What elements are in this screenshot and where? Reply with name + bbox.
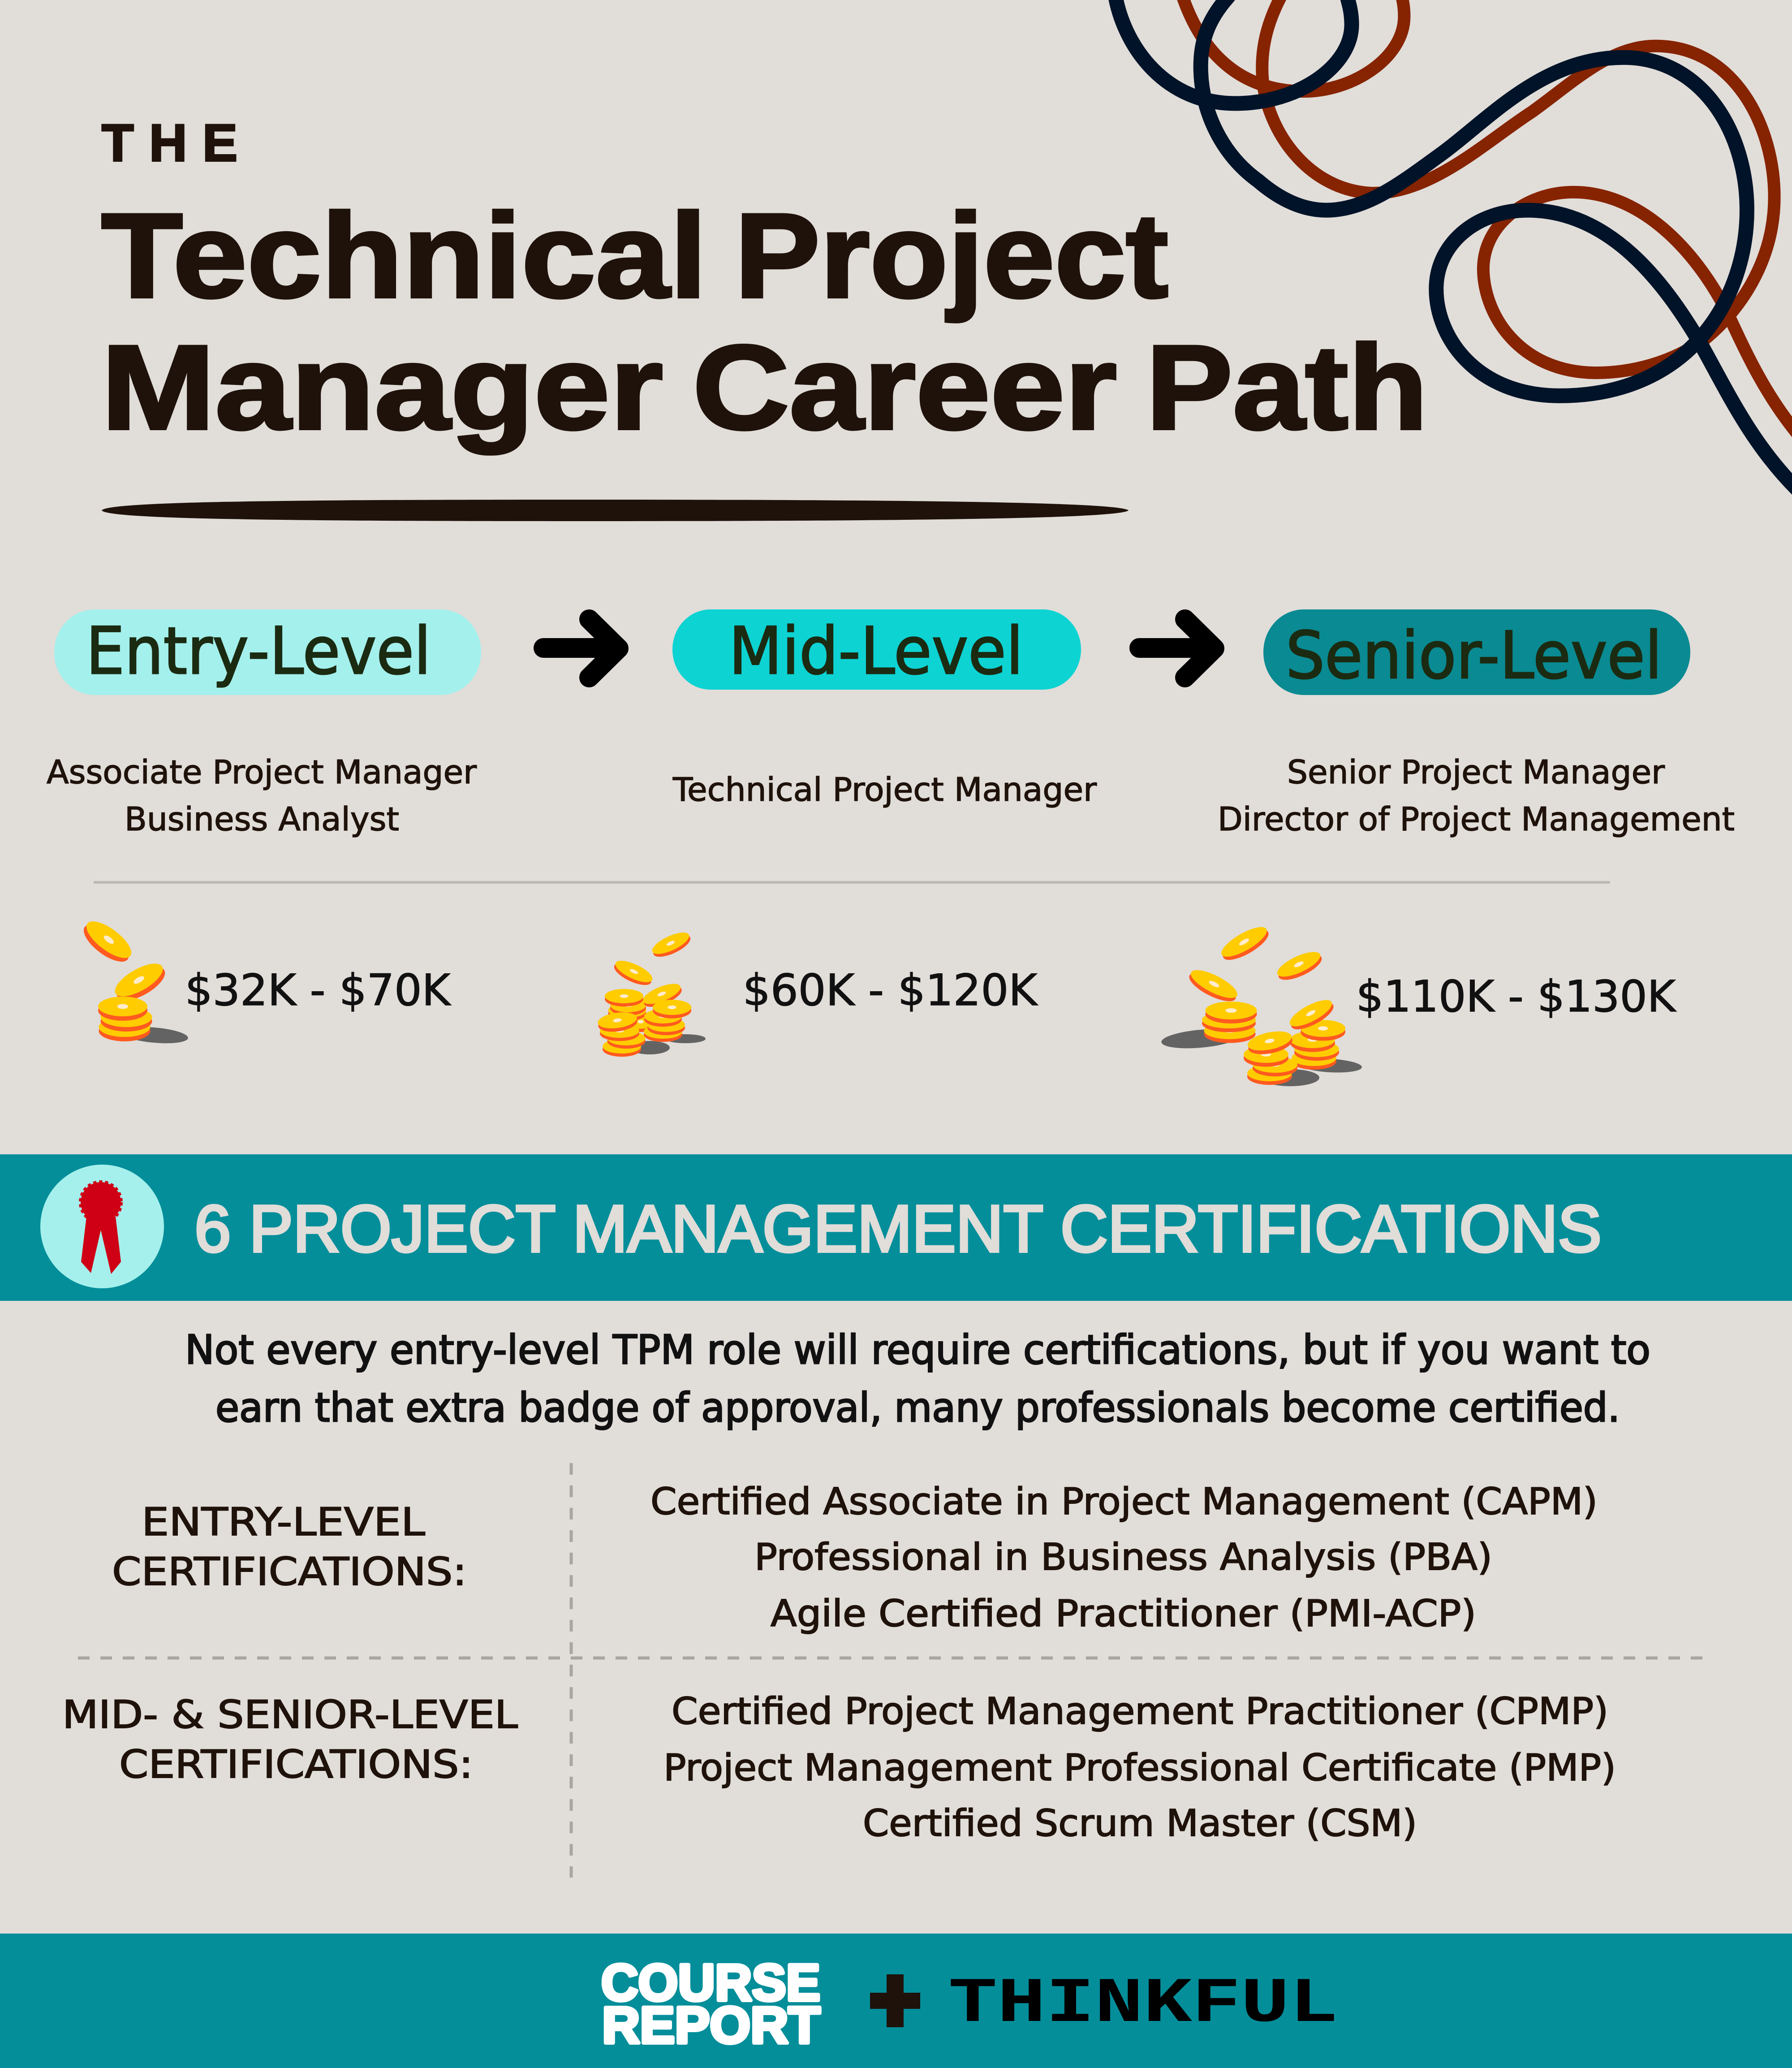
logo: Course Report: COURSE <box>601 1954 820 2012</box>
salaries <box>78 915 1676 1086</box>
icon: coins mid <box>597 928 706 1057</box>
salary entry: $32K - $70K <box>185 965 451 1015</box>
logo: Course Report: REPORT <box>602 1997 820 2054</box>
title line 2 <box>101 320 1428 455</box>
senior-level roles: Director of Project Management <box>1218 800 1735 838</box>
list: entry-level certifications <box>650 1481 1598 1635</box>
title line 2: Manager <box>101 320 663 455</box>
certification table <box>62 1481 1616 1845</box>
label: mid and senior certifications: MID- & SENIOR-LEVEL <box>62 1692 518 1737</box>
title line 1 <box>101 188 1168 324</box>
label: mid and senior certifications: CERTIFICATIONS: <box>119 1742 473 1787</box>
title line 1: Project <box>735 188 1168 324</box>
list: entry-level certifications: Agile Certified Practitioner (PMI-ACP) <box>771 1593 1476 1635</box>
intro paragraph: earn that extra badge of approval, many professionals become certified. <box>215 1384 1620 1431</box>
title line 2: Career <box>693 320 1117 454</box>
label: entry-level certifications: ENTRY-LEVEL <box>142 1500 425 1545</box>
list: entry-level certifications: Professional in Business Analysis (PBA) <box>754 1536 1492 1579</box>
pill: senior-level: Senior-Level <box>1286 618 1662 694</box>
logo: Course Report <box>601 1954 820 2054</box>
entry-level roles: Business Analyst <box>125 800 399 838</box>
arrow: mid to senior <box>1139 619 1215 678</box>
senior-level roles: Senior Project Manager <box>1287 753 1665 791</box>
label: mid and senior certifications <box>62 1692 518 1787</box>
arrow: entry to mid <box>543 619 619 678</box>
intro paragraph <box>185 1326 1650 1431</box>
list: mid and senior certifications: Certified Project Management Practitioner (CPMP) <box>672 1690 1608 1733</box>
salary senior: $110K - $130K <box>1356 971 1676 1022</box>
pill: mid-level: Mid-Level <box>729 613 1023 689</box>
senior-level roles <box>1218 753 1735 838</box>
eyebrow: THE: THE <box>102 113 237 172</box>
entry-level roles <box>47 753 477 838</box>
title line 1: Technical <box>101 188 707 323</box>
mid-level role: Technical Project Manager <box>672 771 1097 808</box>
certifications banner <box>0 1154 1792 1301</box>
list: entry-level certifications: Certified Associate in Project Management (CAPM) <box>650 1481 1598 1523</box>
title line 2: Path <box>1146 320 1428 454</box>
footer band <box>0 1934 1792 2068</box>
salary mid: $60K - $120K <box>743 965 1038 1015</box>
pill: entry-level: Entry-Level <box>86 613 431 689</box>
icon: coins senior <box>1161 922 1362 1086</box>
career levels <box>54 609 1690 695</box>
intro paragraph: Not every entry-level TPM role will require certifications, but if you want to <box>185 1326 1650 1373</box>
list: mid and senior certifications <box>663 1690 1616 1845</box>
icon: coins entry <box>78 915 189 1045</box>
banner heading: 6 PROJECT MANAGEMENT CERTIFICATIONS <box>194 1192 1602 1266</box>
icon: plus sign <box>870 1974 920 2027</box>
decorative squiggle lines <box>1116 0 1792 489</box>
list: mid and senior certifications: Certified Scrum Master (CSM) <box>863 1802 1417 1845</box>
logo: Thinkful: THINKFUL <box>948 1968 1338 2040</box>
entry-level roles: Associate Project Manager <box>47 753 477 791</box>
list: mid and senior certifications: Project Management Professional Certificate (PMP) <box>663 1747 1616 1789</box>
title block <box>101 113 1428 521</box>
icon: award ribbon <box>40 1165 164 1288</box>
label: entry-level certifications: CERTIFICATIONS: <box>112 1550 467 1594</box>
title underline stroke <box>102 500 1129 521</box>
job titles <box>47 753 1735 838</box>
label: entry-level certifications <box>112 1500 467 1594</box>
